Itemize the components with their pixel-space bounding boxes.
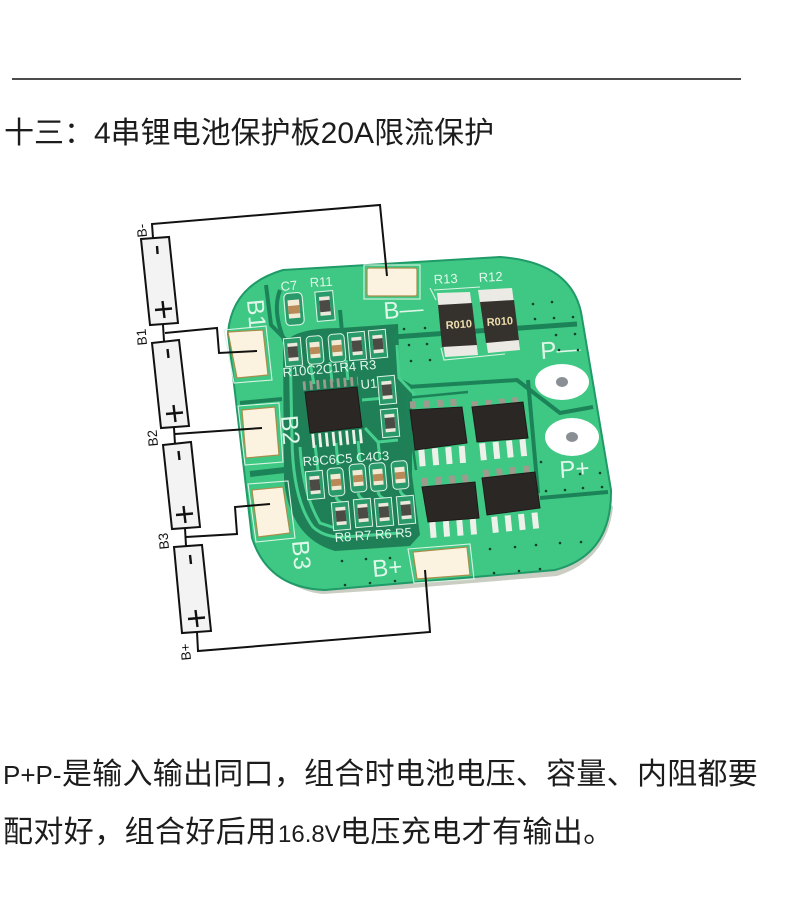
small SMD components — [283, 291, 416, 531]
board edge shadow — [253, 480, 613, 594]
protection board — [224, 257, 613, 594]
battery 1 — [141, 237, 178, 325]
silkscreen component labels: R9C6C5 C4C3 — [302, 448, 390, 469]
sense resistors R13 R12 — [437, 288, 520, 357]
test vias — [341, 301, 603, 586]
silkscreen component labels: U1 — [360, 376, 378, 392]
silkscreen component labels: R12 — [478, 269, 503, 285]
silkscreen component labels: R8 R7 R6 R5 — [334, 525, 412, 545]
description text: 16.8V — [278, 821, 341, 848]
dark traces — [240, 285, 608, 498]
silkscreen component labels: B2 — [275, 414, 304, 446]
wire label: B-: B- — [134, 223, 150, 238]
silkscreen component labels: C7 — [280, 278, 298, 294]
silkscreen component labels: B+ — [371, 553, 403, 583]
title: 十三：4串锂电池保护板20A限流保护 — [4, 117, 494, 150]
silkscreen component labels: P— — [540, 335, 581, 365]
battery pack wiring diagram — [134, 205, 430, 661]
silkscreen component labels: P+ — [559, 455, 590, 484]
bright traces in copper area — [290, 340, 415, 537]
central dark copper area — [283, 324, 420, 551]
battery 2 — [152, 340, 189, 428]
description text — [3, 758, 758, 849]
header rule — [12, 78, 741, 80]
description text: P+P- — [3, 760, 62, 790]
wire: B3 — [185, 504, 270, 546]
wire: B- — [152, 205, 387, 276]
P- and P+ terminals — [535, 364, 599, 456]
silkscreen component labels: B1 — [241, 298, 270, 330]
MOSFET chips — [410, 400, 541, 530]
wire label: B1: B1 — [134, 328, 150, 346]
wire label: B3: B3 — [156, 532, 172, 550]
description text: 是输入输出同口，组合时电池电压、容量、内阻都要 — [62, 758, 758, 791]
sense resistors R13 R12: R010 — [486, 315, 513, 329]
silkscreen component labels: B— — [383, 295, 424, 325]
solder pads — [228, 268, 470, 579]
silkscreen component labels — [241, 269, 590, 583]
sense resistors R13 R12: R010 — [445, 318, 472, 332]
wire: B1 — [163, 325, 257, 353]
silkscreen component labels: R11 — [309, 274, 333, 290]
silkscreen component labels: R13 — [433, 271, 458, 287]
wire: B+ — [197, 570, 430, 651]
silkscreen outlines — [224, 265, 505, 583]
battery 3 — [163, 442, 200, 529]
board body — [228, 257, 611, 590]
controller IC — [303, 381, 364, 441]
description text: 配对好，组合好后用 — [3, 816, 277, 849]
wire: B2 — [174, 428, 262, 444]
silkscreen component labels: R10C2C1R4 R3 — [282, 357, 377, 380]
battery 4 — [174, 545, 211, 633]
description text: 电压充电才有输出。 — [340, 816, 614, 849]
wire label: B2: B2 — [145, 429, 161, 447]
silkscreen component labels: B3 — [286, 539, 315, 571]
wire label: B+: B+ — [178, 643, 194, 661]
